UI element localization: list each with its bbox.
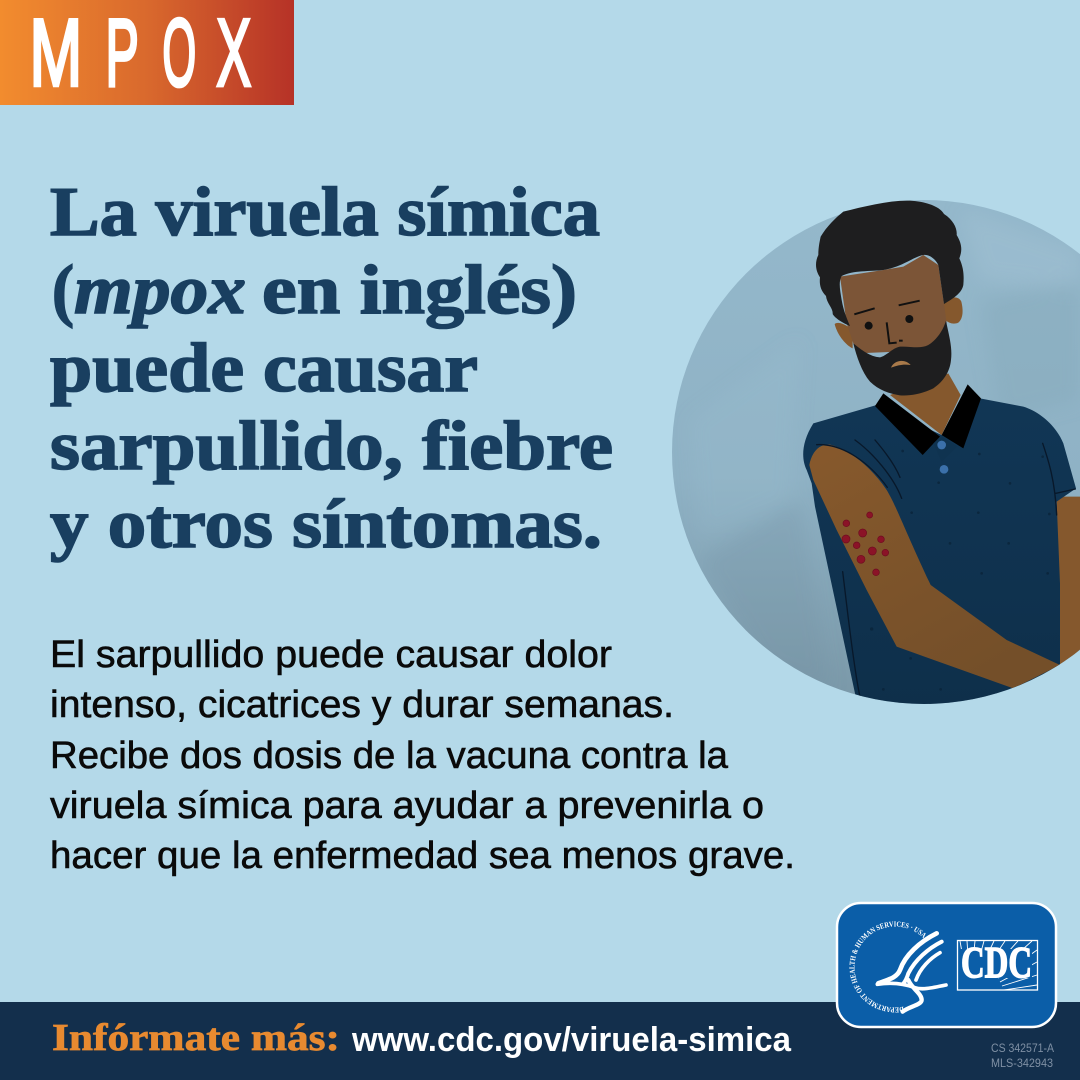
body text: intenso, cicatrices y durar semanas. <box>50 684 674 726</box>
beard <box>853 321 951 395</box>
hair <box>816 201 964 326</box>
badge: MPOX: O <box>162 0 196 106</box>
face <box>840 255 947 353</box>
document codes: CS 342571-A <box>991 1043 1054 1055</box>
eyes <box>865 322 873 330</box>
badge: MPOX <box>0 0 294 107</box>
shirt fold lines <box>817 440 1075 697</box>
HHS eagle <box>877 933 946 1012</box>
body text: viruela símica para ayudar a prevenirla o <box>50 785 764 827</box>
shirt <box>803 398 1076 710</box>
badge: MPOX: P <box>106 0 139 107</box>
logo: HHS and CDC <box>836 902 1058 1028</box>
footer call to action: www.cdc.gov/viruela-simica <box>351 1021 792 1059</box>
title: sarpullido, fiebre <box>50 408 613 485</box>
title: ( <box>52 252 74 329</box>
buttons <box>937 441 946 449</box>
circular background <box>672 200 1080 704</box>
title: y otros síntomas. <box>50 486 602 563</box>
footer call to action: Infórmate más: <box>52 1017 340 1059</box>
neck <box>890 373 961 435</box>
title: puede causar <box>50 330 478 407</box>
HHS seal text: DEPARTMENT OF HEALTH & HUMAN SERVICES · USA <box>850 922 926 1012</box>
ears <box>835 323 853 348</box>
footer bar <box>0 1002 1080 1080</box>
CDC box: CDC <box>961 938 1032 987</box>
footer call to action <box>52 1017 792 1059</box>
brows and nose <box>854 301 920 343</box>
body text: El sarpullido puede causar dolor <box>50 634 612 676</box>
body text <box>50 634 795 877</box>
badge: MPOX: X <box>216 0 251 107</box>
mouth <box>891 361 911 368</box>
title <box>50 174 613 563</box>
right arm <box>1057 497 1080 670</box>
rash <box>842 512 889 576</box>
document codes <box>991 1043 1054 1070</box>
title: mpox <box>74 252 246 329</box>
body text: Recibe dos dosis de la vacuna contra la <box>50 735 729 777</box>
head <box>816 201 964 395</box>
collar <box>875 393 940 455</box>
badge: MPOX: M <box>30 0 82 107</box>
document codes: MLS-342943 <box>991 1058 1053 1070</box>
title: La viruela símica <box>50 174 600 251</box>
illustration: man with rash on arm <box>672 200 1080 710</box>
title: en inglés) <box>262 252 577 329</box>
torso and arms <box>803 373 1080 710</box>
left arm <box>809 445 1060 688</box>
body text: hacer que la enfermedad sea menos grave. <box>50 835 795 877</box>
shirt dots <box>870 450 1051 691</box>
